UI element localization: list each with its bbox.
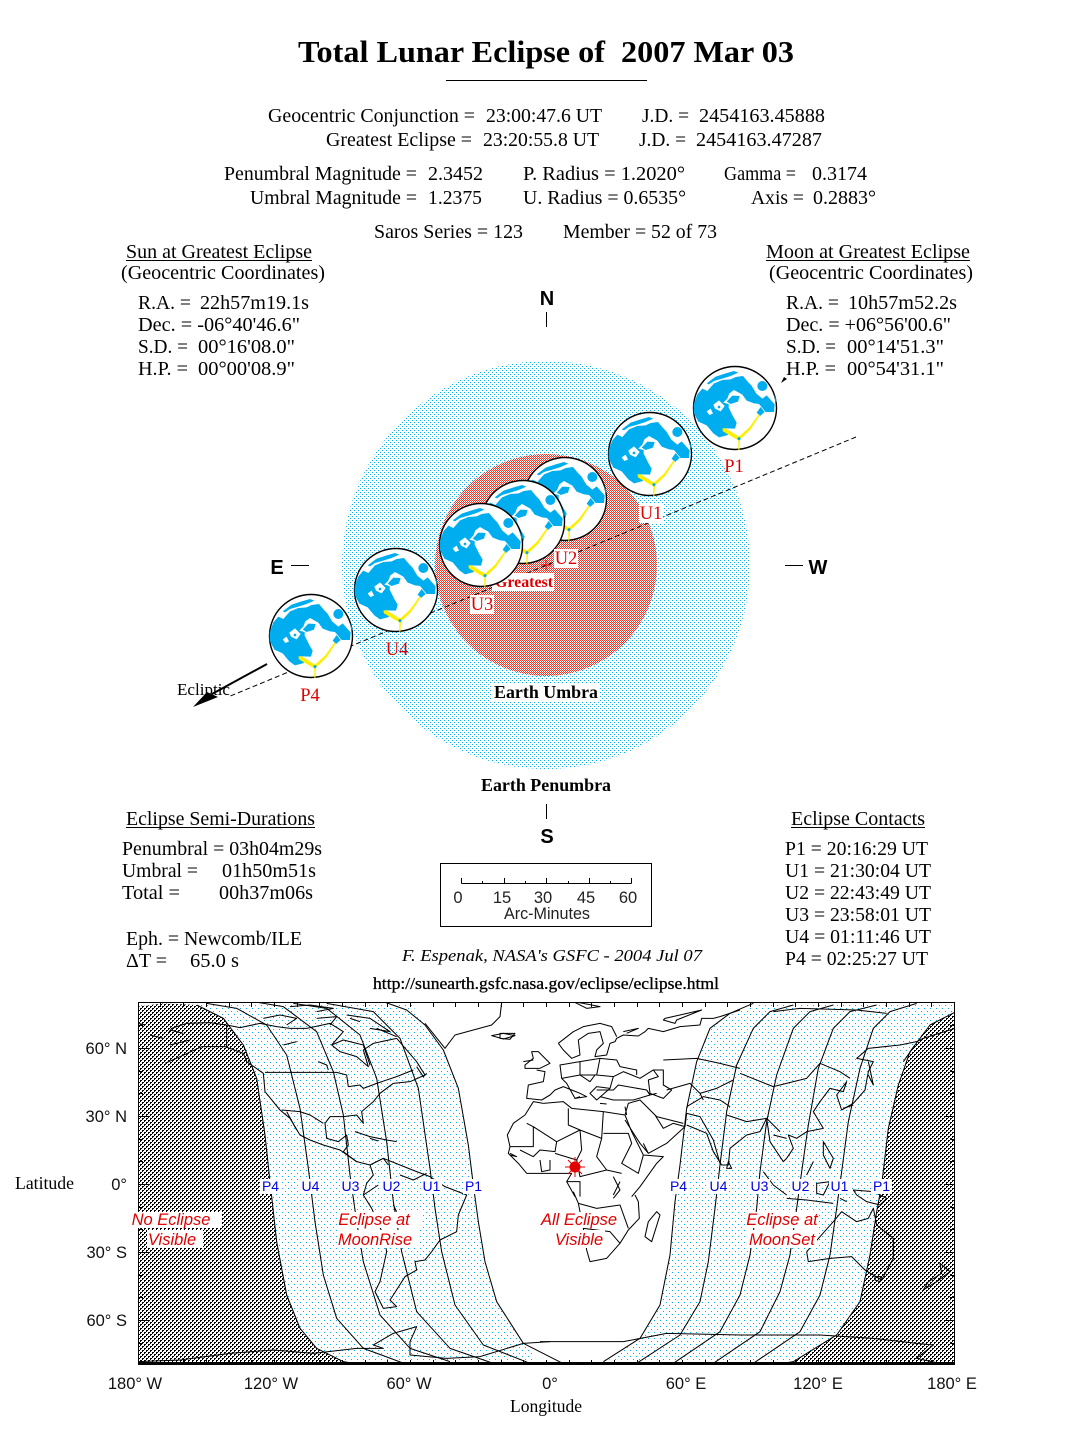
scale bar: arc-minutes: 15: [493, 889, 511, 907]
panel: sun coordinates: [121, 242, 325, 380]
latitude axis labels: 60° S: [86, 1312, 127, 1330]
text block: conjunction and greatest eclipse times: 23:00:47.6 UT: [486, 106, 602, 127]
panel: eclipse semi-durations: Umbral =: [122, 861, 198, 882]
map contact labels east: P4: [670, 1178, 687, 1194]
panel: eclipse semi-durations: [122, 809, 322, 972]
coastlines west hemisphere: [138, 1002, 550, 1362]
panel: visibility map: [132, 1002, 956, 1365]
url line: http://sunearth.gsfc.nasa.gov/eclipse/eclipse.html: [373, 974, 719, 993]
map region label: eclipse at moonrise: Eclipse at: [338, 1211, 411, 1229]
text block: conjunction and greatest eclipse times: J.D. =: [642, 106, 689, 127]
panel: eclipse contacts: P1 = 20:16:29 UT: [785, 839, 928, 860]
moon at P4: [270, 594, 353, 678]
label: U3: U3: [471, 595, 493, 615]
map contact labels east: U4: [710, 1178, 728, 1194]
panel: eclipse semi-durations: 01h50m51s: [222, 861, 316, 882]
text block: magnitudes, radii, gamma, axis: Gamma =: [724, 164, 796, 185]
label: earth umbra: Earth Umbra: [494, 682, 598, 702]
map region label: all eclipse visible: Visible: [555, 1231, 603, 1249]
panel: sun coordinates: 00°16'08.0": [198, 337, 295, 358]
map zone: all eclipse visible east half: [533, 1002, 773, 1364]
scale bar: arc-minutes: [440, 864, 652, 926]
panel: moon coordinates: 10h57m52.2s: [848, 293, 957, 314]
panel: eclipse semi-durations: Penumbral = 03h04m29s: [122, 839, 322, 860]
text block: magnitudes, radii, gamma, axis: P. Radius = 1.2020°: [523, 164, 685, 185]
map contact labels west: U2: [383, 1178, 401, 1194]
panel: moon coordinates: 00°54'31.1": [847, 359, 944, 380]
text block: magnitudes, radii, gamma, axis: U. Radius = 0.6535°: [523, 188, 686, 209]
map contact labels west: [260, 1178, 484, 1194]
scale bar: arc-minutes: Arc-Minutes: [504, 905, 590, 923]
text block: magnitudes, radii, gamma, axis: 0.2883°: [813, 188, 876, 209]
label: north: N: [540, 288, 554, 310]
text block: conjunction and greatest eclipse times: Greatest Eclipse =: [326, 130, 472, 151]
longitude axis title: Longitude: [510, 1396, 582, 1416]
label: U4: U4: [386, 640, 408, 660]
map contact labels east: P1: [873, 1178, 890, 1194]
map zone: all eclipse visible (white): [410, 1002, 563, 1364]
longitude axis labels: 60° W: [386, 1375, 432, 1393]
panel: eclipse contacts: Eclipse Contacts: [791, 809, 925, 830]
label: west: [785, 557, 828, 579]
scale bar: arc-minutes: 0: [453, 889, 463, 907]
text block: conjunction and greatest eclipse times: 23:20:55.8 UT: [483, 130, 599, 151]
panel: moon coordinates: H.P. =: [786, 359, 836, 380]
label: P4: P4: [300, 686, 320, 706]
map region label: eclipse at moonrise: [337, 1211, 423, 1249]
moon at greatest eclipse: [482, 480, 565, 564]
moon at U2: [524, 458, 607, 541]
arrow: ecliptic direction: [193, 664, 267, 707]
panel: sun coordinates: (Geocentric Coordinates): [121, 263, 325, 284]
title: Total Lunar Eclipse of 2007 Mar 03: [298, 34, 794, 69]
panel: eclipse contacts: P4 = 02:25:27 UT: [785, 949, 928, 970]
panel: sun coordinates: 22h57m19.1s: [200, 293, 309, 314]
scale bar: arc-minutes: 30: [534, 889, 552, 907]
panel: eclipse contacts: U1 = 21:30:04 UT: [785, 861, 931, 882]
map contact labels west: P1: [465, 1178, 482, 1194]
credit line: F. Espenak, NASA's GSFC - 2004 Jul 07: [401, 946, 704, 965]
text block: saros series: [374, 222, 717, 243]
panel: sun coordinates: 00°00'08.9": [198, 359, 295, 380]
map zone: no eclipse east: [796, 1014, 954, 1362]
panel: eclipse contacts: U3 = 23:58:01 UT: [785, 905, 931, 926]
text block: saros series: Member = 52 of 73: [563, 222, 717, 243]
panel: sun coordinates: Sun at Greatest Eclipse: [126, 242, 312, 263]
marker: greatest eclipse centre cross: [541, 560, 551, 570]
map zone: no eclipse west: [139, 1003, 341, 1362]
map base: penumbral zone dots: [138, 1002, 955, 1365]
label: P1: P1: [724, 457, 744, 477]
latitude axis labels: 30° S: [86, 1244, 127, 1262]
panel: moon coordinates: (Geocentric Coordinates): [769, 263, 973, 284]
map contact labels east: U3: [751, 1178, 769, 1194]
scale bar: arc-minutes: 60: [619, 889, 637, 907]
map region label: no eclipse visible: Visible: [148, 1231, 196, 1249]
text block: magnitudes, radii, gamma, axis: 2.3452: [428, 164, 483, 185]
map region label: eclipse at moonset: [746, 1211, 819, 1249]
label: ecliptic: Ecliptic: [177, 680, 230, 699]
panel: moon coordinates: R.A. =: [786, 293, 839, 314]
moon at U3: [440, 504, 523, 587]
map region label: eclipse at moonset: Eclipse at: [746, 1211, 819, 1229]
longitude axis labels: 180° W: [108, 1375, 163, 1393]
longitude axis labels: 60° E: [666, 1375, 706, 1393]
label: south: S: [540, 826, 554, 848]
panel: eclipse contacts: [785, 809, 931, 970]
text block: magnitudes, radii, gamma, axis: 0.3174: [812, 164, 867, 185]
label: U2: U2: [555, 549, 577, 569]
latitude axis title: Latitude: [15, 1173, 74, 1193]
map contact labels east: U1: [831, 1178, 849, 1194]
panel: moon coordinates: S.D. =: [786, 337, 836, 358]
longitude axis labels: 120° W: [244, 1375, 299, 1393]
moon at U1: [608, 412, 692, 496]
text block: conjunction and greatest eclipse times: 2454163.45888: [699, 106, 825, 127]
label: south: [540, 804, 554, 848]
map region label: no eclipse visible: [132, 1211, 222, 1249]
text block: magnitudes, radii, gamma, axis: Umbral Magnitude =: [250, 188, 417, 209]
panel: moon coordinates: 00°14'51.3": [847, 337, 944, 358]
longitude axis labels: 120° E: [793, 1375, 843, 1393]
map region label: all eclipse visible: [540, 1211, 617, 1249]
map frame and ticks: [138, 1002, 955, 1365]
longitude axis labels: 180° E: [927, 1375, 977, 1393]
ecliptic dashed line: [228, 437, 856, 697]
arrow: moon direction: [781, 377, 787, 383]
panel: eclipse semi-durations: ΔT =: [126, 951, 167, 972]
map region label: all eclipse visible: All Eclipse: [540, 1211, 617, 1229]
text block: conjunction and greatest eclipse times: [268, 106, 825, 151]
moon at P1: [694, 366, 777, 450]
panel: sun coordinates: R.A. =: [138, 293, 191, 314]
label: north: [540, 288, 554, 327]
label: west: W: [809, 557, 828, 579]
map region label: no eclipse visible: No Eclipse: [132, 1211, 210, 1229]
map contact labels west: U1: [423, 1178, 441, 1194]
text block: conjunction and greatest eclipse times: J.D. =: [639, 130, 686, 151]
panel: eclipse contacts: U4 = 01:11:46 UT: [785, 927, 931, 948]
map contact labels west: U4: [302, 1178, 320, 1194]
text block: saros series: Saros Series = 123: [374, 222, 523, 243]
text block: magnitudes, radii, gamma, axis: Axis =: [751, 188, 804, 209]
label: U1: U1: [640, 504, 662, 524]
panel: eclipse semi-durations: 65.0 s: [190, 951, 239, 972]
latitude axis labels: 0°: [111, 1176, 127, 1194]
text block: magnitudes, radii, gamma, axis: 1.2375: [428, 188, 482, 209]
panel: sun coordinates: S.D. =: [138, 337, 188, 358]
panel: eclipse semi-durations: Total =: [122, 883, 180, 904]
panel: sun coordinates: Dec. = -06°40'46.6": [138, 315, 300, 336]
text block: magnitudes, radii, gamma, axis: Penumbral Magnitude =: [224, 164, 417, 185]
text block: conjunction and greatest eclipse times: 2454163.47287: [696, 130, 822, 151]
map contact labels west: U3: [342, 1178, 360, 1194]
panel: eclipse contacts: U2 = 22:43:49 UT: [785, 883, 931, 904]
panel: eclipse semi-durations: Eclipse Semi-Durations: [126, 809, 315, 830]
earth penumbra disc: [342, 361, 750, 769]
longitude axis labels: 0°: [542, 1375, 558, 1393]
text block: magnitudes, radii, gamma, axis: [224, 164, 876, 209]
label: greatest: Greatest: [495, 574, 554, 591]
latitude axis labels: 30° N: [86, 1108, 127, 1126]
coastlines europe, africa, middle east: [500, 1002, 740, 1198]
label: earth penumbra: Earth Penumbra: [481, 775, 611, 795]
scale bar: arc-minutes: 45: [577, 889, 595, 907]
moon at U4: [354, 548, 438, 632]
earth umbra disc: [435, 454, 657, 676]
panel: eclipse semi-durations: Eph. = Newcomb/ILE: [126, 929, 302, 950]
contact curves east: P4 U4 U3 U2 U1 P1: [603, 1003, 956, 1365]
map contact labels east: [668, 1178, 892, 1194]
label: east: E: [270, 557, 284, 579]
map region label: eclipse at moonrise: MoonRise: [338, 1231, 412, 1249]
icon: greatest eclipse zenith star: [565, 1157, 585, 1177]
latitude axis labels: [86, 1040, 127, 1330]
map region label: eclipse at moonset: MoonSet: [749, 1231, 816, 1249]
panel: sun coordinates: H.P. =: [138, 359, 188, 380]
panel: moon coordinates: Moon at Greatest Eclipse: [766, 242, 970, 263]
map contact labels east: U2: [792, 1178, 810, 1194]
panel: moon coordinates: Dec. = +06°56'00.6": [786, 315, 951, 336]
latitude axis labels: 60° N: [86, 1040, 127, 1058]
label: east: [270, 557, 309, 579]
contact curves west: P4 U4 U3 U2 U1 P1: [197, 1002, 563, 1365]
text block: conjunction and greatest eclipse times: Geocentric Conjunction =: [268, 106, 475, 127]
panel: eclipse semi-durations: 00h37m06s: [219, 883, 313, 904]
coastlines southern africa, asia, oceania: [540, 1008, 955, 1363]
panel: moon coordinates: [766, 242, 973, 380]
longitude axis labels: [108, 1375, 977, 1393]
map contact labels west: P4: [262, 1178, 279, 1194]
